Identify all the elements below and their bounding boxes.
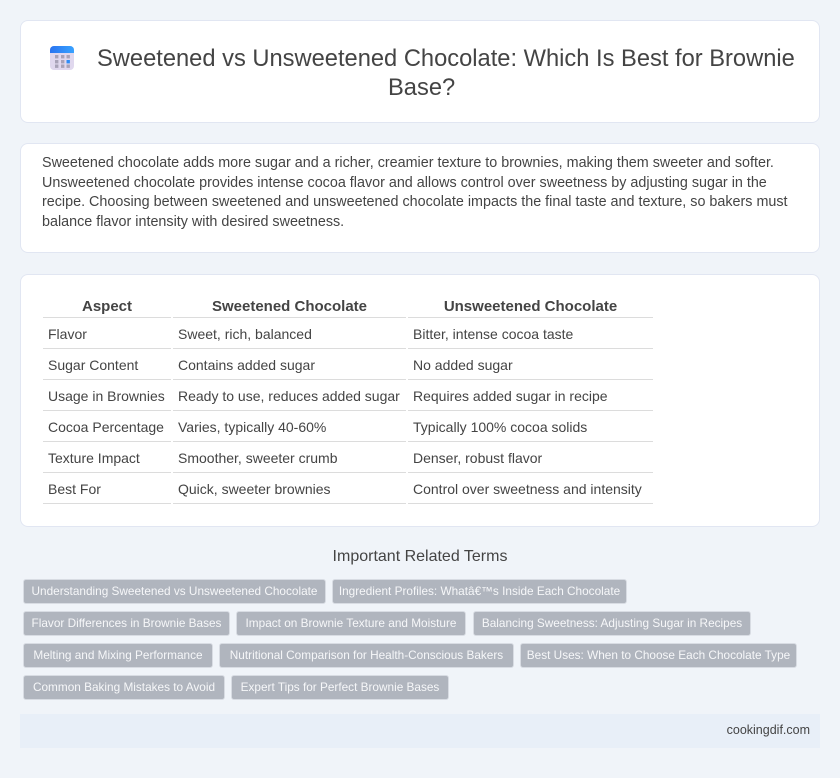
row: texture impact: Texture Impact: [48, 450, 140, 466]
row: best for: Best For: [48, 481, 101, 497]
row: texture impact: [48, 450, 542, 466]
tag: [520, 643, 797, 668]
tag: [219, 643, 514, 668]
row: flavor: [48, 326, 573, 342]
row: texture impact: Denser, robust flavor: [413, 450, 542, 466]
title: [97, 46, 795, 101]
footer text: source: cookingdif.com: [727, 723, 810, 737]
tag: Understanding Sweetened vs Unsweetened Chocolate: [32, 584, 317, 598]
tag: [23, 579, 326, 604]
tag list: [23, 579, 797, 700]
tag: Balancing Sweetness: Adjusting Sugar in Recipes: [482, 616, 742, 630]
text block: introduction: balance flavor intensity with desired sweetness.: [42, 214, 344, 230]
tag: [236, 611, 466, 636]
tag: Impact on Brownie Texture and Moisture: [246, 616, 456, 630]
table header: [82, 298, 617, 315]
row: sugar content: No added sugar: [413, 357, 513, 373]
tag: Ingredient Profiles: Whatâ€™s Inside Each Chocolate: [339, 584, 620, 598]
panel: title header: [20, 20, 820, 123]
row: usage in brownies: [48, 388, 608, 404]
tag: [231, 675, 449, 700]
row: cocoa percentage: [48, 419, 587, 435]
tag: Flavor Differences in Brownie Bases: [32, 616, 221, 630]
row: flavor: Bitter, intense cocoa taste: [413, 326, 573, 342]
tag: Best Uses: When to Choose Each Chocolate Type: [527, 648, 790, 662]
heading: important related terms: Important Related Terms: [333, 548, 507, 565]
row: best for: Control over sweetness and intensity: [413, 481, 642, 497]
icon: calendar: [50, 46, 74, 70]
tag: [23, 675, 225, 700]
footer: [20, 714, 820, 748]
tag: [473, 611, 751, 636]
tag: Nutritional Comparison for Health-Conscious Bakers: [230, 648, 503, 662]
comparison table: [43, 298, 653, 504]
tag: [23, 611, 230, 636]
panel: comparison table: [20, 274, 820, 527]
row: cocoa percentage: Cocoa Percentage: [48, 419, 164, 435]
row: cocoa percentage: Varies, typically 40-60%: [178, 419, 326, 435]
tag: Expert Tips for Perfect Brownie Bases: [241, 680, 439, 694]
title: Base?: [388, 75, 455, 101]
row: sugar content: Contains added sugar: [178, 357, 315, 373]
row: flavor: Flavor: [48, 326, 87, 342]
row: sugar content: [48, 357, 513, 373]
row: texture impact: Smoother, sweeter crumb: [178, 450, 338, 466]
text block: introduction: recipe. Choosing between sweetened and unsweetened chocolate impacts the final taste and texture, so bakers must: [42, 194, 788, 210]
table header: Sweetened Chocolate: [212, 298, 367, 315]
text block: introduction: [42, 155, 788, 230]
panel: introduction: [20, 143, 820, 253]
text block: introduction: Sweetened chocolate adds more sugar and a richer, creamier texture to brownies, making them sweeter and softer.: [42, 155, 774, 171]
row: usage in brownies: Usage in Brownies: [48, 388, 165, 404]
table header: Unsweetened Chocolate: [444, 298, 617, 315]
row: usage in brownies: Ready to use, reduces added sugar: [178, 388, 400, 404]
table header: Aspect: [82, 298, 132, 315]
tag: [23, 643, 213, 668]
row: best for: Quick, sweeter brownies: [178, 481, 331, 497]
tag: Common Baking Mistakes to Avoid: [33, 680, 215, 694]
row: best for: [48, 481, 642, 497]
tag: [332, 579, 627, 604]
text block: introduction: Unsweetened chocolate provides intense cocoa flavor and allows control over sweetness by adjusting sugar in the: [42, 174, 767, 190]
row: cocoa percentage: Typically 100% cocoa solids: [413, 419, 587, 435]
tag: Melting and Mixing Performance: [33, 648, 203, 662]
title: Sweetened vs Unsweetened Chocolate: Which Is Best for Brownie: [97, 46, 795, 72]
row: sugar content: Sugar Content: [48, 357, 138, 373]
row: usage in brownies: Requires added sugar in recipe: [413, 388, 608, 404]
row: flavor: Sweet, rich, balanced: [178, 326, 312, 342]
